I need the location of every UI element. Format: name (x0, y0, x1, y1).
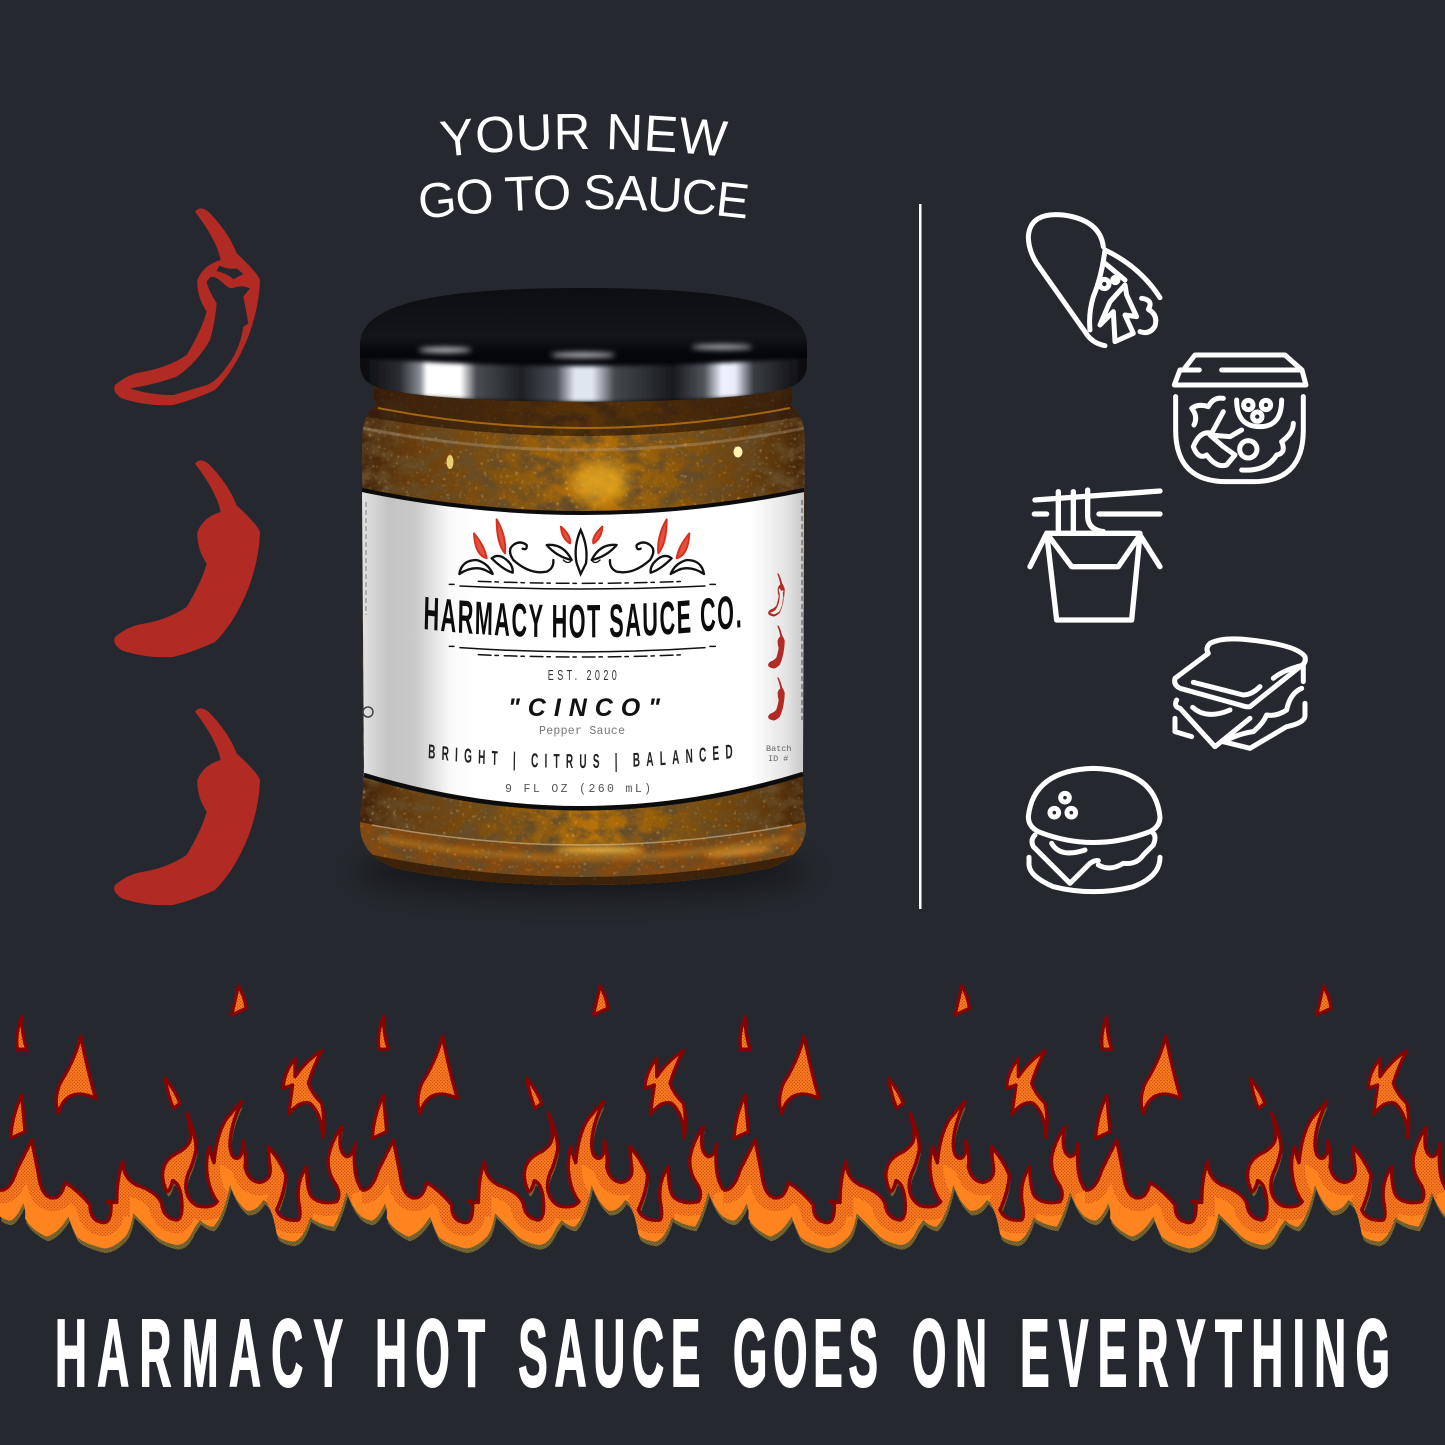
headline: your new go to sauce: YOUR NEW (440, 114, 728, 156)
batch id (766, 744, 792, 764)
icon: solid chili pepper (114, 460, 260, 657)
icon: noodle box (1030, 490, 1160, 620)
label edge fine print (363, 500, 802, 720)
headline: your new go to sauce: GO TO SAUCE (420, 174, 748, 218)
jar shadow (358, 848, 808, 896)
bottom heading: GOES (733, 1299, 878, 1407)
sauce type: Pepper Sauce (539, 725, 625, 738)
icon: burrito (1028, 215, 1160, 346)
flame border (0, 986, 1445, 1253)
icon: outlined chili pepper (114, 208, 260, 405)
product: hot sauce jar (360, 288, 807, 898)
label ornament (449, 519, 715, 657)
divider (919, 204, 922, 909)
heat rating: three chili peppers (114, 208, 260, 905)
bottom heading: HARMACY (55, 1299, 343, 1407)
bottom heading (55, 1299, 1390, 1407)
bottom heading: HOT (375, 1299, 485, 1407)
headline: your new go to sauce (420, 114, 748, 218)
label chili peppers (768, 573, 785, 720)
brand name (424, 596, 740, 638)
icon: burger (1028, 768, 1160, 892)
bottom heading: ON (912, 1299, 987, 1407)
established date: EST. 2020 (548, 667, 617, 684)
bottom heading: EVERYTHING (1020, 1299, 1390, 1407)
batch id: ID # (768, 754, 788, 764)
icon: takeout bowl (1174, 355, 1306, 482)
flavor notes: BRIGHT | CITRUS | BALANCED (428, 744, 732, 772)
icon: sandwich (1175, 639, 1305, 748)
variety name: "CINCO" (508, 694, 661, 722)
batch id: Batch (766, 744, 792, 754)
jar body with sauce (355, 380, 815, 890)
icon: solid chili pepper (114, 708, 260, 905)
net volume: 9 FL OZ (260 mL) (505, 783, 651, 796)
food icons (1028, 215, 1306, 892)
bottom heading: SAUCE (518, 1299, 700, 1407)
jar lid (360, 288, 807, 402)
brand name: HARMACY HOT SAUCE CO. (424, 596, 740, 638)
product label (362, 488, 804, 810)
